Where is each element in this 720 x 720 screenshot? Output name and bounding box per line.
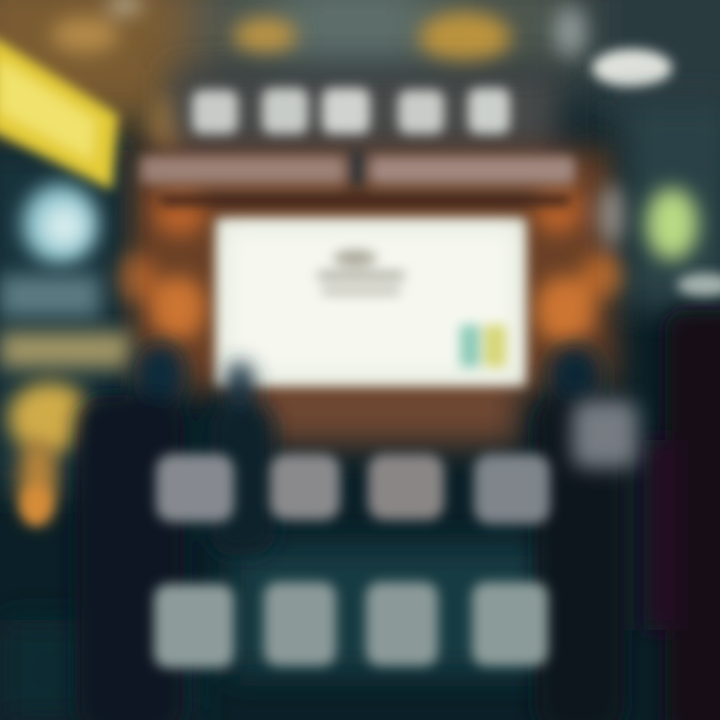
lower floor <box>0 545 550 720</box>
silhouettes: audience left <box>75 343 275 720</box>
right side wall and green light <box>625 100 720 310</box>
presentation screen <box>216 218 526 386</box>
left side screens and lamps <box>0 150 130 525</box>
seats: second row <box>154 582 548 668</box>
ceiling <box>0 0 720 130</box>
banner strip <box>140 150 575 206</box>
left wall sign <box>0 35 118 190</box>
ceiling lights <box>51 0 586 155</box>
silhouettes: audience right <box>535 310 720 720</box>
screen chart <box>318 250 404 294</box>
seats: first row <box>156 454 550 524</box>
screen colour bars <box>460 325 506 367</box>
wall behind screen <box>125 70 615 445</box>
bright ceiling light <box>592 49 672 87</box>
orange lit panels <box>108 185 631 344</box>
banner lettering blobs <box>192 88 510 134</box>
right side grey panel <box>572 400 638 468</box>
